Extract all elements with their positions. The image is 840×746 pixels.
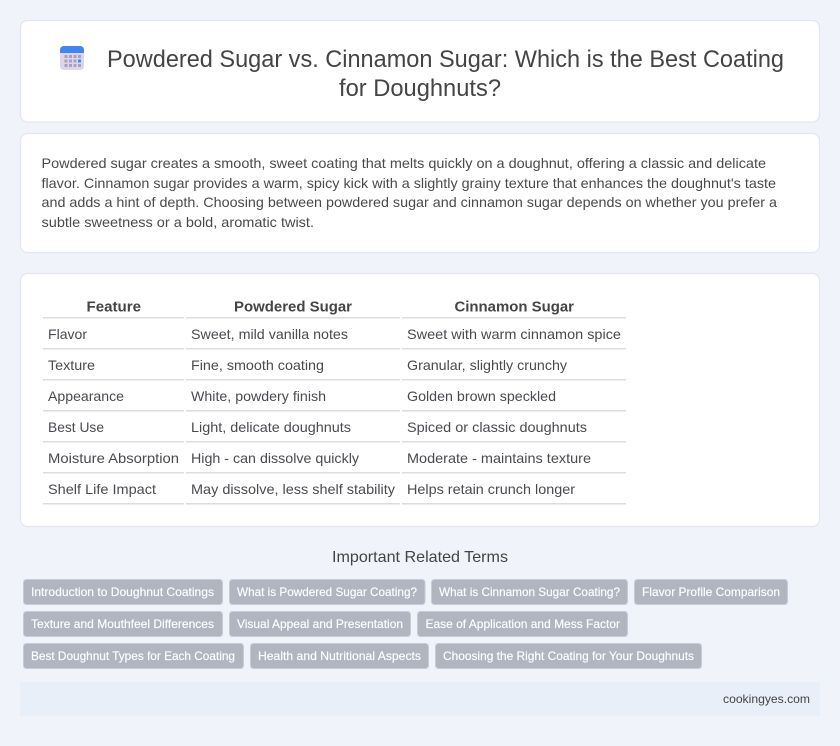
chip	[24, 580, 222, 604]
chip	[230, 580, 425, 604]
text block: description: subtle sweetness or a bold, aromatic twist.	[42, 214, 314, 230]
title: Powdered Sugar vs. Cinnamon Sugar: Which is the Best Coating	[107, 46, 784, 73]
table row: texture	[48, 357, 567, 373]
table row: shelf life impact: Helps retain crunch longer	[407, 481, 575, 497]
chip	[24, 612, 222, 636]
text block: description: Powdered sugar creates a smooth, sweet coating that melts quickly on a doughnut, offering a classic and delicate	[42, 155, 766, 171]
table header	[86, 300, 574, 316]
related terms chips	[24, 580, 788, 668]
panel: introduction paragraph	[20, 134, 820, 252]
panel: comparison table	[20, 274, 820, 526]
table header: Feature	[86, 300, 141, 316]
text block: description	[42, 155, 777, 230]
chip: What is Powdered Sugar Coating?	[237, 585, 417, 599]
table row: shelf life impact	[48, 481, 575, 497]
table row: flavor: Flavor	[48, 326, 87, 342]
table row: best use	[48, 419, 587, 435]
table row: moisture absorption: Moderate - maintains texture	[407, 450, 591, 466]
chip: What is Cinnamon Sugar Coating?	[439, 585, 620, 599]
chip: Flavor Profile Comparison	[642, 585, 780, 599]
table row: texture: Granular, slightly crunchy	[407, 357, 567, 373]
footer	[20, 682, 820, 716]
heading: important related terms: Important Related Terms	[332, 549, 508, 566]
table row: shelf life impact: May dissolve, less shelf stability	[191, 481, 395, 497]
chip	[634, 580, 788, 604]
table row: moisture absorption: Moisture Absorption	[48, 450, 179, 466]
chip	[418, 612, 628, 636]
table row: texture: Fine, smooth coating	[191, 357, 324, 373]
table row: flavor	[48, 326, 621, 342]
chip	[250, 644, 428, 668]
table header: Cinnamon Sugar	[454, 300, 574, 316]
table row: appearance: Appearance	[48, 388, 124, 404]
table row: flavor: Sweet, mild vanilla notes	[191, 326, 348, 342]
table row: best use: Best Use	[48, 419, 104, 435]
footer source text: cookingyes.com	[723, 692, 810, 706]
chip: Best Doughnut Types for Each Coating	[31, 649, 235, 663]
table row: appearance: White, powdery finish	[191, 388, 326, 404]
chip	[432, 580, 628, 604]
chip: Visual Appeal and Presentation	[237, 617, 403, 631]
table row: moisture absorption	[48, 450, 591, 466]
chip: Health and Nutritional Aspects	[258, 649, 421, 663]
title	[107, 46, 784, 102]
panel: title header	[20, 20, 820, 122]
table row: appearance: Golden brown speckled	[407, 388, 556, 404]
table header: Powdered Sugar	[234, 300, 352, 316]
table row: moisture absorption: High - can dissolve quickly	[191, 450, 359, 466]
chip	[436, 644, 702, 668]
text block: description: flavor. Cinnamon sugar provides a warm, spicy kick with a slightly grainy texture that enhances the doughnut's taste	[42, 175, 776, 191]
chip: Introduction to Doughnut Coatings	[31, 585, 214, 599]
table row: shelf life impact: Shelf Life Impact	[48, 481, 156, 497]
chip: Texture and Mouthfeel Differences	[31, 617, 214, 631]
title: for Doughnuts?	[339, 75, 501, 102]
icon: calendar	[60, 46, 84, 70]
chip: Ease of Application and Mess Factor	[426, 617, 620, 631]
text block: description: and adds a hint of depth. Choosing between powdered sugar and cinnamon sugar depends on whether you prefer a	[42, 194, 777, 210]
table row: appearance	[48, 388, 556, 404]
chip	[230, 612, 410, 636]
table row: flavor: Sweet with warm cinnamon spice	[407, 326, 621, 342]
table row: best use: Light, delicate doughnuts	[191, 419, 351, 435]
table row: best use: Spiced or classic doughnuts	[407, 419, 587, 435]
chip	[24, 644, 244, 668]
table row: texture: Texture	[48, 357, 95, 373]
chip: Choosing the Right Coating for Your Doughnuts	[443, 649, 694, 663]
